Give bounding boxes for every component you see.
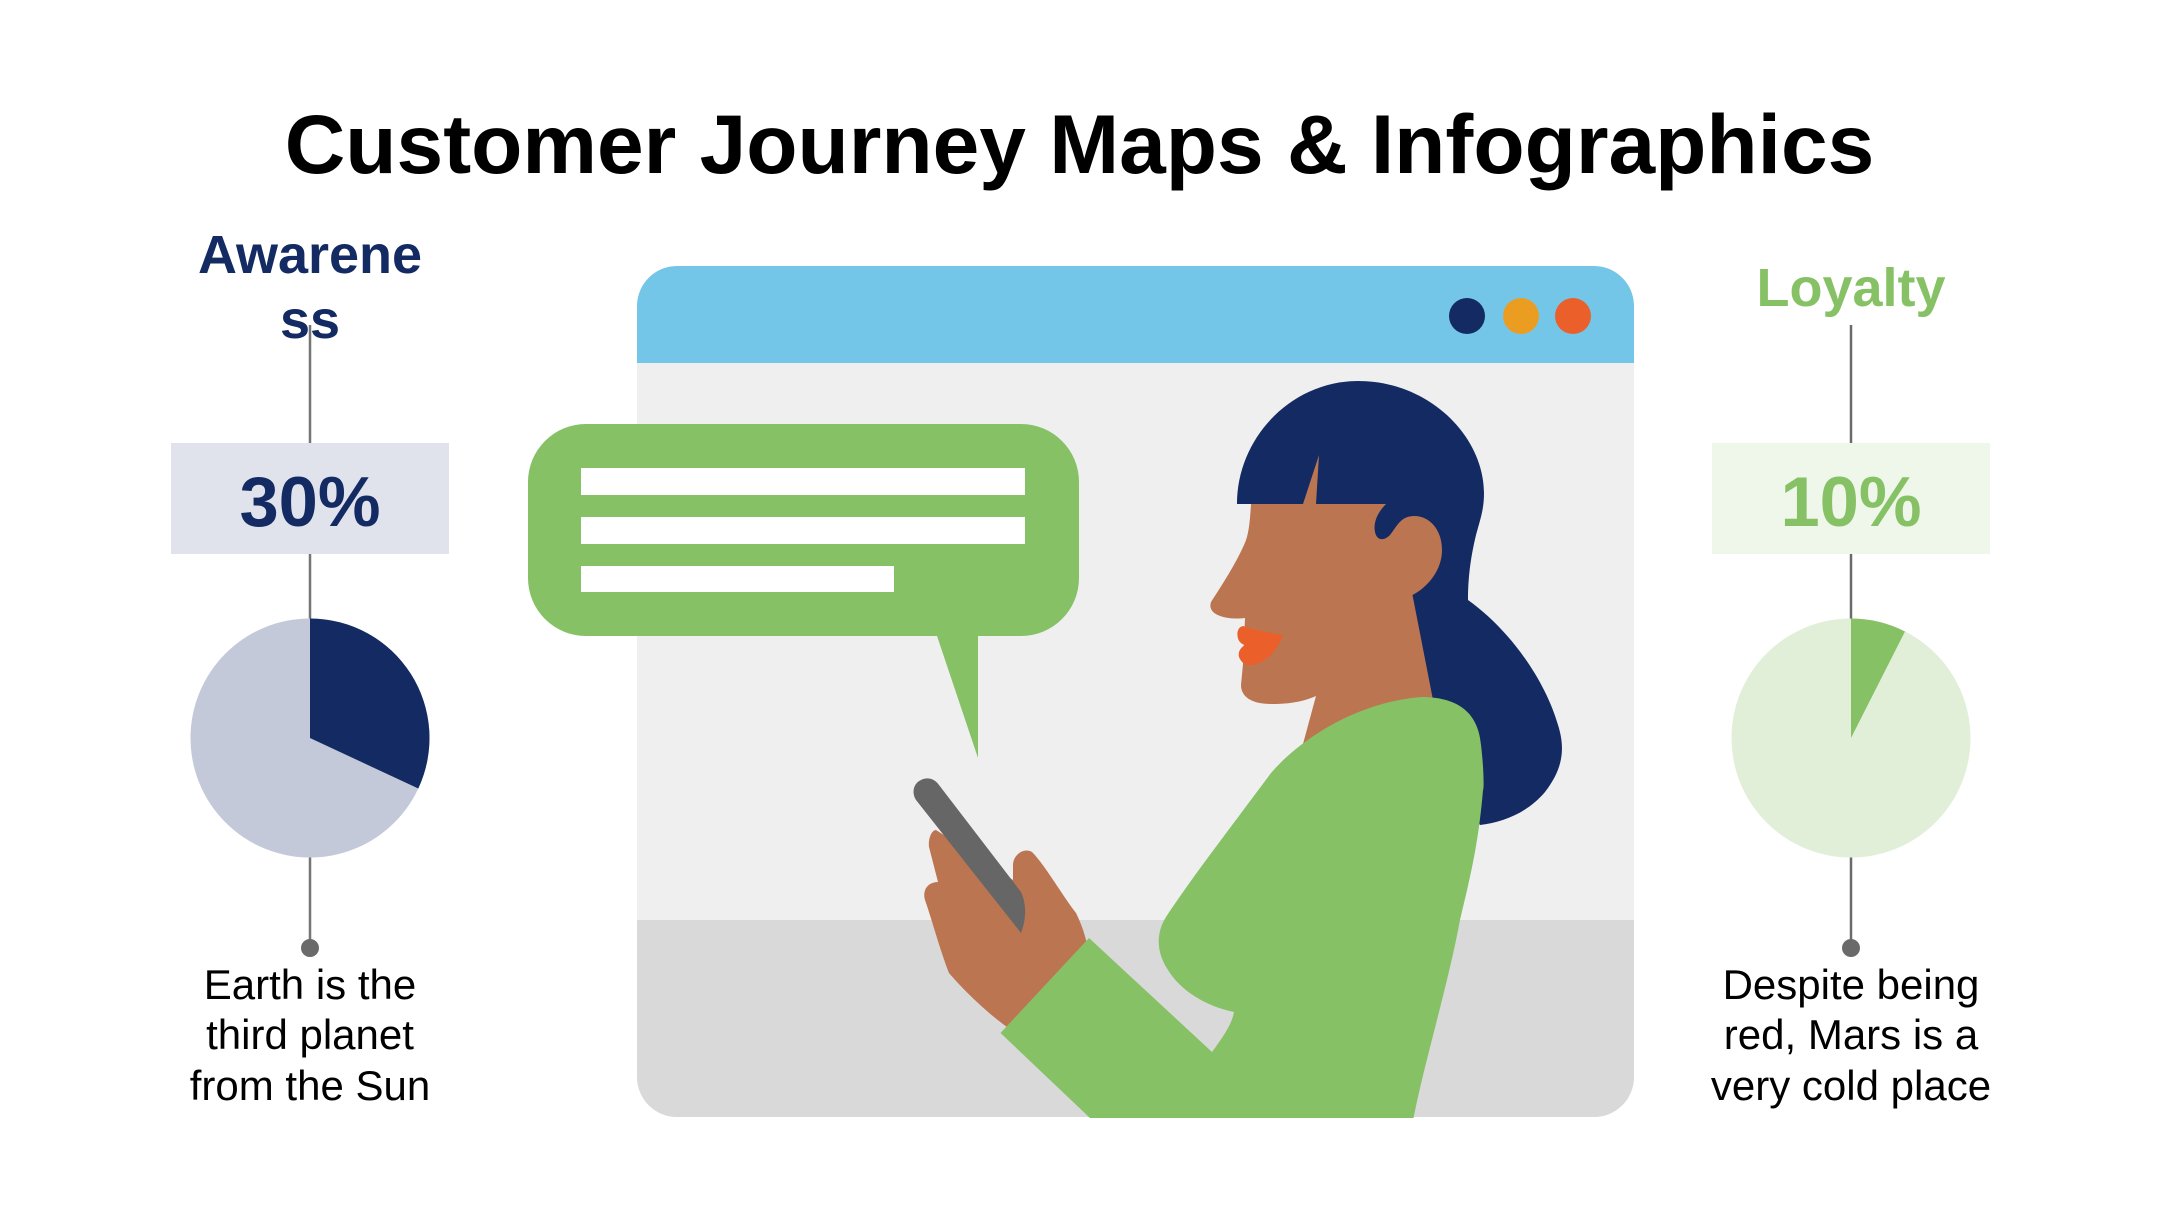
illustration: woman with phone xyxy=(914,381,1562,1118)
window body xyxy=(637,362,1634,1117)
phone xyxy=(914,778,1025,933)
connector line: awareness xyxy=(309,325,311,948)
lips xyxy=(1237,626,1283,665)
panel: awareness column xyxy=(171,225,449,1109)
pie chart: 10% xyxy=(1732,618,1970,858)
pie chart: 30% xyxy=(190,618,430,858)
connector end dot xyxy=(301,939,319,957)
green sweater xyxy=(1000,697,1484,1118)
window floor band xyxy=(637,920,1634,1117)
heading: loyalty: Loyalty xyxy=(1756,258,1946,318)
description: mars: very cold place xyxy=(1711,1062,1991,1109)
title: Customer Journey Maps & Infographics xyxy=(285,97,1874,191)
hair parting highlight xyxy=(1303,455,1319,504)
bubble text lines xyxy=(581,468,1025,592)
description: mars: Despite being xyxy=(1723,961,1979,1008)
window control dots xyxy=(1449,298,1591,334)
bubble body with tail xyxy=(528,424,1079,758)
panel: browser window illustration xyxy=(637,266,1634,1117)
stat box: 30% xyxy=(171,443,449,554)
description: mars: red, Mars is a xyxy=(1724,1011,1979,1058)
speech bubble xyxy=(528,424,1079,758)
hand xyxy=(924,830,1088,1027)
description: earth: Earth is the xyxy=(204,961,416,1008)
stat box: 10% xyxy=(1712,443,1990,554)
connector line: loyalty xyxy=(1850,325,1852,948)
stat box: 30%: 30% xyxy=(239,462,381,541)
description: earth: third planet xyxy=(206,1011,414,1058)
heading: awareness: ss xyxy=(280,290,340,350)
panel: loyalty column xyxy=(1711,258,1991,1109)
stat box: 10%: 10% xyxy=(1780,462,1922,541)
connector end dot xyxy=(1842,939,1860,957)
hair xyxy=(1237,381,1562,825)
description: earth: from the Sun xyxy=(190,1062,430,1109)
heading: awareness: Awarene xyxy=(198,225,422,285)
neck and face xyxy=(1210,504,1442,755)
window title bar xyxy=(637,266,1634,363)
